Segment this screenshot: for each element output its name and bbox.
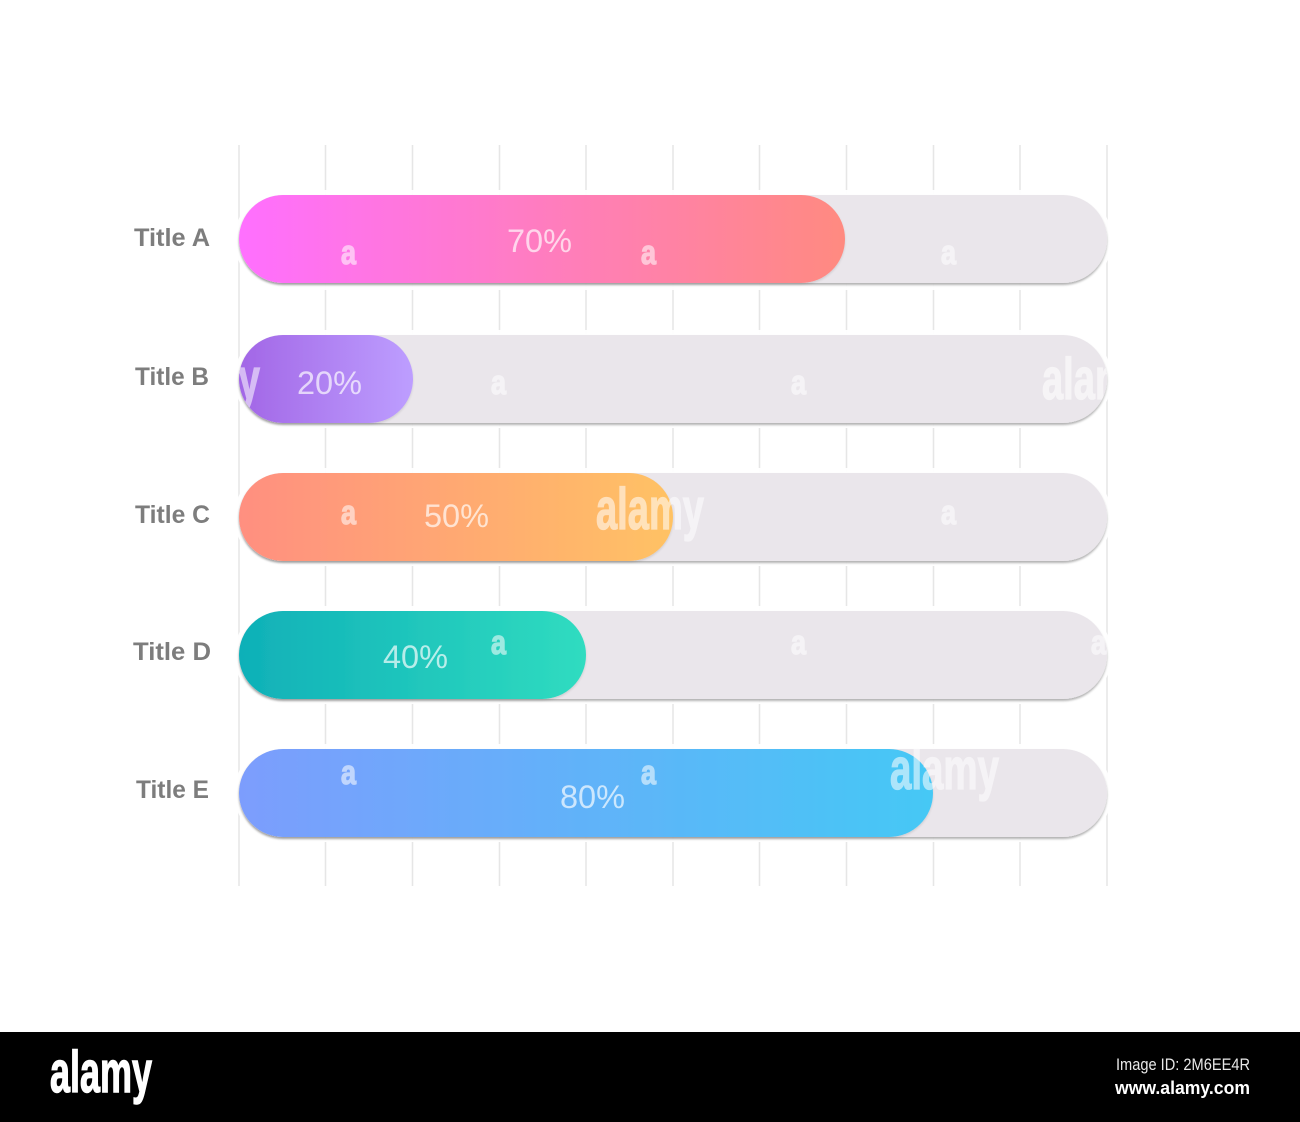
- label C: Title C: [135, 501, 210, 529]
- track B: [234, 330, 1112, 428]
- watermark overlay: a: [341, 754, 357, 792]
- bar row: Title A: [134, 190, 1112, 290]
- fill E 80%: [239, 749, 933, 837]
- watermark overlay: a: [641, 754, 657, 792]
- value A: 70%: [507, 223, 572, 259]
- watermark overlay: a: [941, 494, 957, 532]
- watermark overlay: a: [1091, 624, 1107, 662]
- bar row: Title C: [135, 468, 1112, 566]
- fill A 70%: [239, 195, 845, 283]
- website: www.alamy.com: [1114, 1078, 1250, 1098]
- track A: [234, 190, 1112, 290]
- bar row: Title D: [133, 606, 1112, 704]
- value B: 20%: [297, 365, 362, 401]
- watermark overlay: a: [641, 234, 657, 272]
- fill D 40%: [239, 611, 586, 699]
- watermark overlay: a: [941, 234, 957, 272]
- label D: Title D: [133, 638, 211, 666]
- value E: 80%: [560, 779, 625, 815]
- label A: Title A: [134, 224, 210, 252]
- grid lines: [239, 145, 1107, 886]
- value C: 50%: [424, 498, 489, 534]
- watermark overlay: alamy: [596, 477, 704, 542]
- bar row: Title B: [135, 330, 1112, 428]
- label B: Title B: [135, 363, 209, 391]
- watermark overlay: [240, 245, 1106, 802]
- track E: [234, 744, 1112, 842]
- image id: Image ID: 2M6EE4R: [1116, 1055, 1250, 1074]
- watermark overlay: a: [791, 364, 807, 402]
- value D: 40%: [383, 639, 448, 675]
- track D: [234, 606, 1112, 704]
- footer bar: [0, 1032, 1300, 1122]
- fill B 20%: [239, 335, 413, 423]
- watermark overlay: a: [341, 494, 357, 532]
- fill C 50%: [239, 473, 673, 561]
- watermark overlay: a: [341, 234, 357, 272]
- track C: [234, 468, 1112, 566]
- watermark overlay: a: [491, 364, 507, 402]
- watermark overlay: alamy: [890, 737, 999, 802]
- bar row: Title E: [136, 744, 1112, 842]
- label E: Title E: [136, 776, 209, 804]
- watermark overlay: alamy: [1042, 347, 1150, 412]
- watermark overlay: a: [791, 624, 807, 662]
- watermark overlay: alamy: [150, 347, 260, 412]
- footer logo: alamy: [50, 1040, 152, 1105]
- watermark overlay: a: [491, 624, 507, 662]
